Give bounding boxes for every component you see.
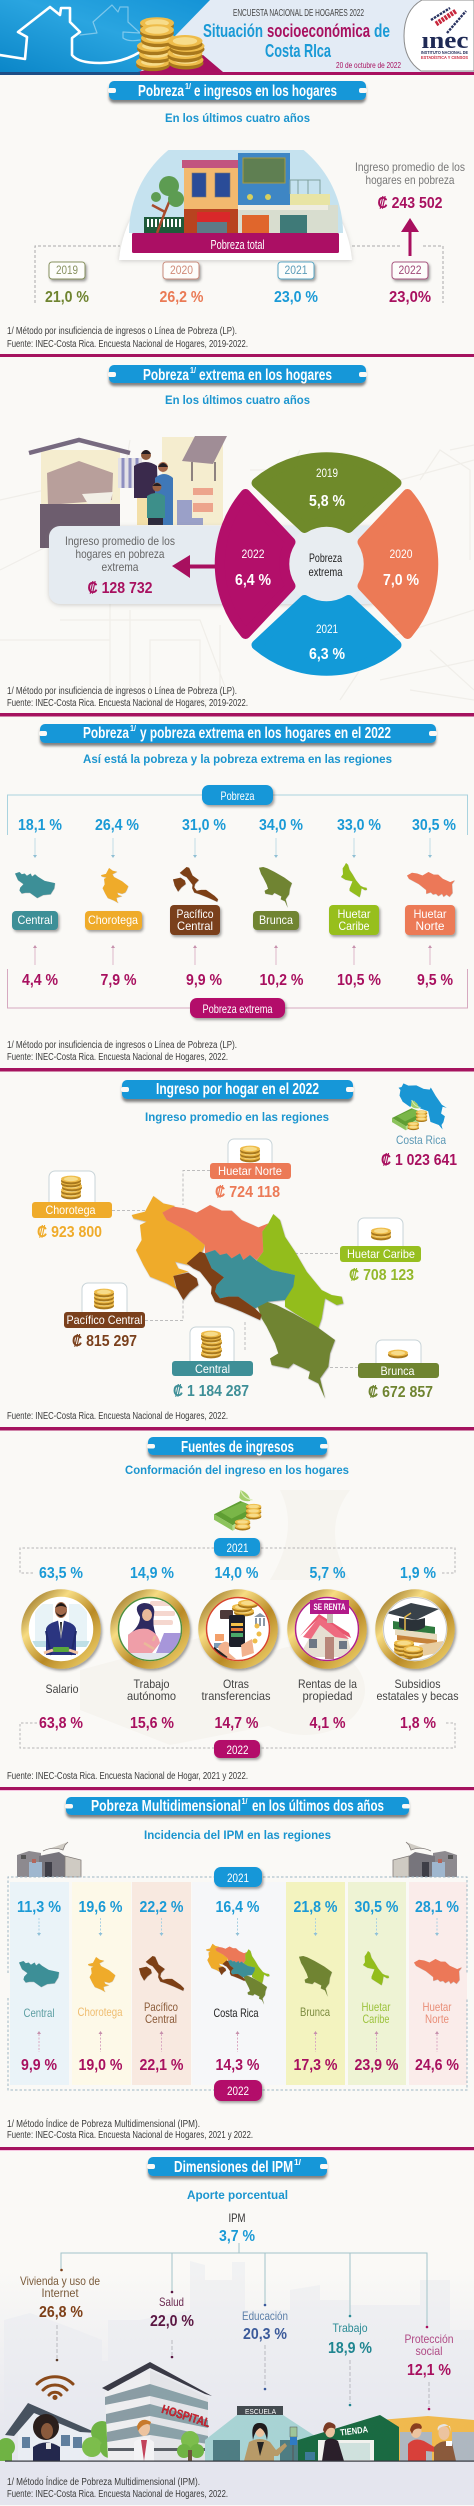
card: Huetar Caribe [340,1218,421,1284]
icon: otras transferencias [202,1593,274,1665]
pill: 2021: 2021 [226,1541,249,1555]
values 2022: 63,8 % [39,1715,83,1732]
dashed frame [35,246,443,303]
icon: houses left [17,1842,81,1877]
region: Pacífico Central [170,867,220,935]
region labels: Brunca [300,2005,330,2019]
callout: ingreso promedio pobreza: hogares en pobreza [366,173,455,187]
labels: transferencias [202,1689,270,1703]
values 2021 [39,1565,436,1582]
dimension: vivienda: Vivienda y uso de [20,2274,100,2288]
arrows down [35,838,430,856]
illustration: tienda [298,2415,474,2461]
card: Chorotega: ₡ 923 800 [37,1224,102,1241]
card: Chorotega [32,1171,112,1241]
values pobreza extrema: 7,9 % [100,972,136,989]
year: 2022: 23,0% [389,289,431,306]
dimension: proteccion social: Protección [404,2332,454,2346]
panel: pobreza extrema [0,365,474,709]
IPM total: IPM [228,2211,246,2225]
footnote: 1/ Método Índice de Pobreza Multidimensional (IPM). [7,2117,200,2130]
region: Brunca: Brunca [259,913,293,927]
footnote: Fuente: INEC-Costa Rica. Encuesta Nacional de Hogares, 2019-2022. [7,339,248,350]
footnote: Fuente: INEC-Costa Rica. Encuesta Nacional de Hogares, 2021 y 2022. [7,2130,253,2141]
arrowheads up [37,2031,439,2034]
card: Brunca: ₡ 672 857 [368,1384,433,1401]
header band [0,0,474,75]
footnote [7,326,248,350]
card: Pacífico Central: Pacífico Central [66,1313,142,1327]
heading ribbon 2 [108,365,367,384]
region labels: Pacífico [144,2000,178,2014]
region: Central [12,872,58,930]
band: pobreza total [132,233,339,253]
subheading: Conformación del ingreso en los hogares [125,1463,349,1477]
heading ribbon 5: Fuentes de ingresos [181,1439,294,1456]
year: 2021: 2021 [284,263,308,277]
arrowheads down [37,1933,439,1936]
connector dots [60,2269,428,2328]
dimension: vivienda [20,2274,100,2361]
pill: pobreza [202,785,273,805]
ring segment 2020 [362,494,433,634]
panel: dimensiones del IPM [0,2157,474,2505]
dimension: educacion: 20,3 % [243,2326,287,2343]
dimension: salud [150,2295,194,2358]
panel: regiones 2022 [7,724,468,1063]
arrows up [35,948,430,965]
values 2021: 11,3 % [17,1899,61,1916]
pill: 2021 [214,1867,262,1887]
footnote [7,1040,237,1063]
ring: center: Pobreza [309,551,342,565]
values pobreza [18,817,456,834]
illustration: house with woman [0,2403,97,2461]
values 2022: 24,6 % [415,2057,459,2074]
icon: subsidios y becas [379,1593,451,1665]
main title [203,21,390,61]
values 2022: 23,9 % [354,2057,398,2074]
tree connector [61,2243,427,2327]
survey line: ENCUESTA NACIONAL DE HOGARES 2022 [233,8,364,19]
ring segment 2022 [220,494,290,634]
year: 2020: 2020 [170,263,193,277]
ring segment 2022: 6,4 % [235,572,271,589]
labels: Rentas de la [298,1677,357,1691]
card: Central [172,1327,253,1400]
ring segment 2019: 2019 [316,466,338,480]
heading ribbon 1: Pobreza [138,83,184,100]
footnote: Fuente: INEC-Costa Rica. Encuesta Nacional de Hogares, 2022. [7,2489,228,2500]
footnote [7,686,248,709]
pill: 2022: 2022 [227,2084,249,2098]
main title: socioeconómica [267,21,371,41]
ring segment 2021: 6,3 % [309,646,345,663]
region labels: Caribe [362,2012,390,2026]
column backgrounds [10,1882,467,2085]
year: 2020: 26,2 % [160,289,204,306]
region maps [19,1951,462,1997]
footnote [7,2475,228,2500]
heading ribbon 7: Dimensiones del IPM [174,2159,293,2176]
values 2022: 19,0 % [78,2057,122,2074]
labels [46,1677,458,1703]
pill: 2022: 2022 [226,1743,249,1757]
dashed frames [20,1548,455,1748]
values 2022: 14,3 % [216,2057,260,2074]
heading ribbon 3: y pobreza extrema en los hogares en el 2022 [140,725,391,742]
subheading: Incidencia del IPM en las regiones [144,1828,331,1842]
arrowheads down [33,855,432,858]
region: Huetar Caribe [329,863,379,935]
year: 2019 [45,262,89,306]
main title: Situación [203,21,263,41]
heading ribbon 2: Pobreza [143,367,189,384]
heading ribbon 6: 1/ [242,1797,248,1806]
year: 2019: 2019 [56,263,78,277]
footnote: 1/ Método por insuficiencia de ingresos o Línea de Pobreza (LP). [7,326,237,337]
icon: rentas de la propiedad [291,1593,363,1665]
values pobreza: 33,0 % [337,817,381,834]
values 2022: 17,3 % [294,2057,338,2074]
logo: INEC [404,0,474,71]
dimension: salud: 22,0 % [150,2313,194,2330]
pill: 2021 [214,1538,260,1556]
ring segment 2019: 5,8 % [309,493,345,510]
total Costa Rica: ₡ 1 023 641 [381,1152,457,1169]
pill: pobreza extrema: Pobreza extrema [202,1002,273,1016]
panel: pobreza multidimensional [7,1797,467,2141]
values 2022: 9,9 % [21,2057,57,2074]
arch with buildings: Pobreza total [210,237,265,252]
region: Huetar Norte: Norte [416,919,445,933]
heading ribbon 7: 1/ [294,2158,302,2167]
values 2021: 63,5 % [39,1565,83,1582]
heading ribbon 1: e ingresos en los hogares [194,83,337,100]
icon: coin stacks [136,17,204,71]
logo: INEC: ESTADÍSTICA Y CENSOS [421,53,468,60]
card: Central: Central [195,1362,230,1376]
values 2021: 5,7 % [310,1565,346,1582]
pill: pobreza extrema [190,998,285,1018]
heading ribbon 2: extrema en los hogares [199,367,332,384]
ring: center [286,523,368,605]
card: Huetar Caribe: ₡ 708 123 [349,1267,414,1284]
illustration: hospital [82,2362,212,2461]
arrows down [39,1918,437,1935]
ring: center: extrema [308,565,343,579]
region labels: Central [24,2006,54,2020]
callout: ingreso pobreza extrema: ₡ 128 732 [88,580,153,597]
arrowheads up [33,945,432,948]
arrows up [39,2034,437,2052]
labels: autónomo [127,1689,176,1703]
illustration: school: ESCUELA [245,2407,276,2416]
heading ribbon 6 [65,1797,410,1815]
callout: ingreso pobreza extrema: extrema [102,560,139,574]
ring segment 2021: 2021 [316,622,338,636]
subheading: En los últimos cuatro años [165,393,310,407]
card: Huetar Norte: ₡ 724 118 [215,1184,280,1201]
region labels: Huetar [362,2000,390,2014]
icon: trabajo autonomo [114,1593,186,1665]
dimension: educacion [242,2309,288,2390]
labels: estatales y becas [376,1689,458,1703]
pill: 2022 [214,2080,262,2101]
card: Huetar Norte [210,1139,291,1201]
values 2022 [39,1715,436,1732]
card: Brunca: Brunca [380,1364,415,1378]
subheading: Así está la pobreza y la pobreza extrema en las regiones [83,752,392,766]
labels: Subsidios [394,1677,440,1691]
heading ribbon 6: en los últimos dos años [252,1798,384,1815]
values 2022: 1,8 % [400,1715,436,1732]
region: Huetar Norte: Huetar [414,907,446,921]
dimension: salud: Salud [159,2295,184,2309]
values pobreza: 31,0 % [182,817,226,834]
values pobreza extrema: 10,5 % [337,972,381,989]
footnote: Fuente: INEC-Costa Rica. Encuesta Nacional de Hogares, 2022. [7,1411,228,1422]
pill: pobreza: Pobreza [220,789,255,803]
callout: ingreso pobreza extrema: Ingreso promedio de los [65,534,175,548]
total Costa Rica [381,1083,457,1169]
region labels: Central [145,2012,177,2026]
IPM total: 3,7 % [219,2228,255,2245]
footnote: 1/ Método por insuficiencia de ingresos o Línea de Pobreza (LP). [7,1040,237,1051]
region: Pacífico Central: Pacífico [176,907,214,921]
values 2021: 14,9 % [130,1565,174,1582]
values pobreza extrema: 9,9 % [186,972,222,989]
illustration: tienda: TIENDA [339,2424,369,2438]
labels: propiedad [302,1689,352,1703]
ring segment 2022: 2022 [242,547,265,561]
year: 2021 [274,262,318,306]
region: Brunca [253,867,299,930]
IPM total [219,2211,255,2245]
values 2022: 14,7 % [214,1715,258,1732]
icon: house outlines [0,5,140,63]
icon: wifi [37,2377,73,2399]
background sketch [0,440,474,700]
ring segment 2021 [256,600,396,671]
heading ribbon 2: 1/ [190,366,197,375]
year: 2020 [160,262,204,306]
illustration: family and houses [29,436,227,548]
values pobreza extrema: 10,2 % [260,972,304,989]
year: 2022 [389,262,431,306]
card: Huetar Norte: Huetar Norte [218,1164,282,1178]
callout: ingreso promedio pobreza [355,160,465,212]
map of Costa Rica [132,1196,343,1398]
region: Huetar Caribe: Caribe [338,919,370,933]
card: Chorotega: Chorotega [46,1203,96,1217]
values 2021: 14,0 % [214,1565,258,1582]
year: 2021: 23,0 % [274,289,318,306]
values pobreza: 30,5 % [412,817,456,834]
dimension: trabajo: 18,9 % [328,2340,372,2357]
values 2022 [21,2057,459,2074]
labels: Otras [223,1677,249,1691]
frame top [8,795,468,835]
footnote: 1/ Método por insuficiencia de ingresos o Línea de Pobreza (LP). [7,686,237,697]
region: Huetar Norte [405,872,455,935]
values pobreza extrema: 4,4 % [22,972,58,989]
illustration: school [205,2406,315,2461]
scene background and skyline [0,2261,474,2505]
icon: money [214,1490,261,1531]
callout: ingreso pobreza extrema [49,526,379,604]
values 2021 [17,1899,459,1916]
region: Chorotega: Chorotega [88,913,138,927]
values 2022: 4,1 % [310,1715,346,1732]
labels: Salario [46,1682,79,1696]
card: Huetar Caribe: Huetar Caribe [347,1247,415,1261]
values pobreza: 26,4 % [95,817,139,834]
heading ribbon 3 [39,724,437,743]
dimension: trabajo [328,2321,372,2406]
callout: ingreso pobreza extrema: hogares en pobreza [76,547,165,561]
subheading: Aporte porcentual [187,2188,288,2202]
pill: 2021: 2021 [227,1871,249,1885]
watermark money [80,1490,365,1745]
subheading: En los últimos cuatro años [165,111,310,125]
values 2021: 21,8 % [294,1899,338,1916]
arch with buildings [119,150,352,260]
dashed frame [8,1877,467,2090]
region labels: Norte [425,2012,449,2026]
region: Pacífico Central: Central [177,919,213,933]
subheading: Ingreso promedio en las regiones [145,1110,329,1124]
dimension: trabajo: Trabajo [332,2321,368,2335]
region labels [24,2000,452,2026]
card: Pacífico Central [64,1283,145,1350]
values pobreza: 34,0 % [259,817,303,834]
values 2021: 1,9 % [400,1565,436,1582]
heading ribbon 3: Pobreza [83,725,129,742]
dimension: vivienda: Internet [42,2286,79,2300]
region labels: Huetar [422,2000,452,2014]
dimension: vivienda: 26,8 % [39,2304,83,2321]
values 2021: 22,2 % [140,1899,184,1916]
illustration: people helping [408,2423,456,2461]
ring segment 2020: 2020 [390,547,413,561]
footnote: Fuente: INEC-Costa Rica. Encuesta Nacional de Hogar, 2021 y 2022. [7,1771,248,1782]
heading ribbon 1 [108,81,367,100]
illustration: hospital: HOSPITAL [160,2402,212,2430]
icon: houses right [393,1842,457,1877]
card: Central: ₡ 1 184 287 [173,1383,249,1400]
footnote: 1/ Método Índice de Pobreza Multidimensional (IPM). [7,2475,200,2488]
labels: Trabajo [134,1677,170,1691]
region labels: Costa Rica [214,2006,259,2020]
ground line [5,2460,474,2462]
dimension: proteccion social: social [416,2344,442,2358]
footnote: Fuente: INEC-Costa Rica. Encuesta Nacional de Hogares, 2022. [7,1052,228,1063]
card: Pacífico Central: ₡ 815 297 [72,1333,137,1350]
values 2021: 16,4 % [216,1899,260,1916]
region: Central: Central [18,913,52,927]
heading ribbon 3: 1/ [130,724,137,733]
heading ribbon 5 [147,1437,328,1456]
map: Costa Rica mini [206,1944,270,2004]
values 2021: 30,5 % [354,1899,398,1916]
heading ribbon 1: 1/ [185,82,192,91]
panel: fuentes de ingresos [7,1437,458,1782]
pill: 2022 [214,1740,260,1758]
logo: INEC: ınec [422,28,469,54]
region: Huetar Caribe: Huetar [338,907,370,921]
dimension: educacion: Educación [242,2309,288,2323]
arrow up [401,218,419,256]
heading ribbon 6: Pobreza Multidimensional [91,1798,241,1815]
callout: ingreso promedio pobreza: ₡ 243 502 [378,195,443,212]
values 2021: 19,6 % [78,1899,122,1916]
arrow left [172,555,216,578]
values 2022: 22,1 % [140,2057,184,2074]
date: 20 de octubre de 2022 [336,60,401,70]
dimension: proteccion social: 12,1 % [407,2362,451,2379]
values 2022: 15,6 % [130,1715,174,1732]
values pobreza: 18,1 % [18,817,62,834]
values pobreza extrema [22,972,453,989]
heading ribbon 4: Ingreso por hogar en el 2022 [156,1081,319,1098]
ring segment 2019 [256,457,396,528]
region labels: Chorotega [78,2005,123,2019]
year: 2019: 21,0 % [45,289,89,306]
card: Brunca [358,1340,439,1401]
main title: Costa RIca [265,41,332,61]
dimension: proteccion social [404,2332,454,2410]
footnote: Fuente: INEC-Costa Rica. Encuesta Nacional de Hogares, 2019-2022. [7,698,248,709]
values pobreza extrema: 9,5 % [417,972,453,989]
panel: ingreso por hogar [7,1080,457,1422]
year: 2022: 2022 [398,263,422,277]
values 2021: 28,1 % [415,1899,459,1916]
main title: de [374,21,390,41]
footnote [7,2117,253,2141]
connectors [112,1170,358,1368]
ring segment 2020: 7,0 % [383,572,419,589]
icon: salario [25,1593,97,1665]
panel: pobreza e ingresos [7,81,465,350]
region: Chorotega [85,868,142,930]
icon: rentas de la propiedad: SE RENTA [314,1602,346,1612]
total Costa Rica: Costa Rica [396,1133,446,1147]
frame bottom [8,969,468,1008]
